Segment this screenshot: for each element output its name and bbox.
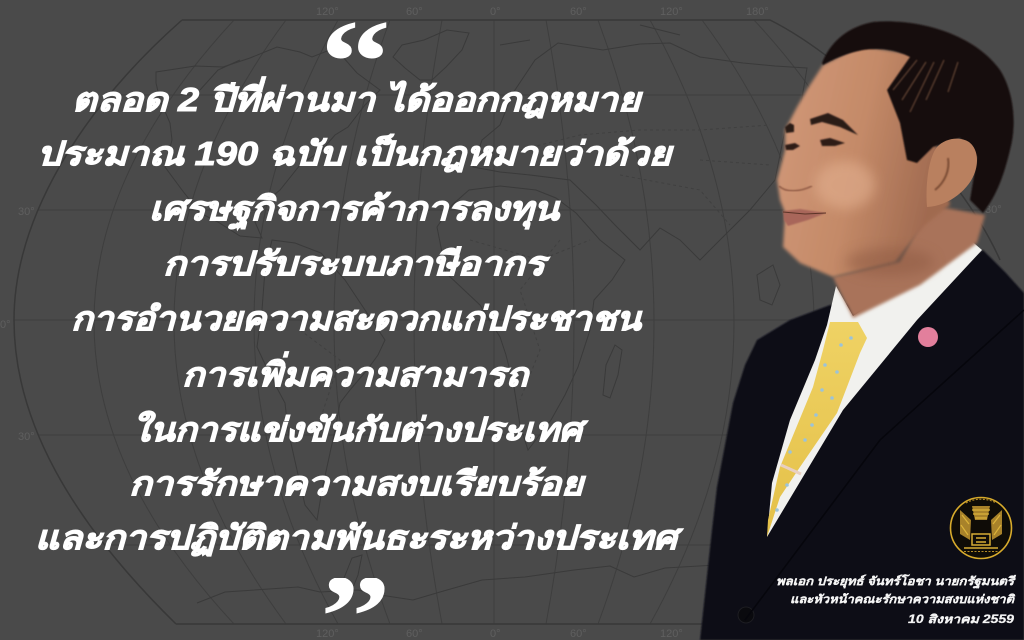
map degree labels: 30° xyxy=(18,206,35,218)
quote text: และการปฏิบัติตามพันธะระหว่างประเทศ xyxy=(35,519,684,557)
ear xyxy=(927,139,977,207)
map degree labels: 180° xyxy=(746,6,769,18)
map degree labels: 120° xyxy=(316,628,339,640)
nose shadow xyxy=(779,186,812,191)
map degree labels: 60° xyxy=(570,628,587,640)
tie clip xyxy=(781,465,801,474)
quote text: ประมาณ 190 ฉบับ เป็นกฎหมายว่าด้วย xyxy=(37,133,674,173)
mouth xyxy=(783,209,826,226)
jaw shadow xyxy=(846,248,934,276)
caption: name, title and date: และหัวหน้าคณะรักษาความสงบแห่งชาติ xyxy=(790,593,1016,606)
cheek highlight xyxy=(815,161,875,209)
quote text: ในการแข่งขันกับต่างประเทศ xyxy=(132,410,589,448)
map degree labels: 120° xyxy=(660,628,683,640)
tie dots xyxy=(775,336,853,512)
eyes xyxy=(785,138,845,150)
caption: name, title and date: 10 สิงหาคม 2559 xyxy=(908,613,1015,626)
portrait of the prime minister xyxy=(700,21,1024,640)
face xyxy=(777,46,950,277)
lapel pin xyxy=(918,327,938,347)
neck xyxy=(833,205,985,318)
yellow tie xyxy=(767,322,867,537)
map degree labels: 60° xyxy=(406,628,423,640)
caption: name, title and date xyxy=(776,574,1016,626)
government seal xyxy=(950,498,1012,558)
jacket button xyxy=(738,607,754,623)
hair xyxy=(822,21,1014,213)
map degree labels: 30° xyxy=(985,204,1002,216)
map degree labels: 60° xyxy=(406,6,423,18)
caption: name, title and date: พลเอก ประยุทธ์ จันทร์โอชา นายกรัฐมนตรี xyxy=(776,574,1016,589)
quote text xyxy=(35,76,684,557)
quote text: การเพิ่มความสามารถ xyxy=(182,351,530,393)
lapel shadow line xyxy=(745,310,1024,620)
map degree labels: 120° xyxy=(316,6,339,18)
quote text: ตลอด 2 ปีที่ผ่านมา ได้ออกกฎหมาย xyxy=(72,76,643,119)
quote text: การอำนวยความสะดวกแก่ประชาชน xyxy=(71,300,643,337)
shirt and collar xyxy=(767,238,982,537)
eyebrows xyxy=(785,113,858,135)
map degree labels: 0° xyxy=(490,628,501,640)
map degree labels: 0° xyxy=(0,319,11,331)
quote text: การปรับระบบภาษีอากร xyxy=(163,245,551,282)
hair highlights xyxy=(893,60,958,112)
quote text: เศรษฐกิจการค้าการลงทุน xyxy=(149,190,561,231)
map degree labels: 60° xyxy=(570,6,587,18)
map degree labels: 120° xyxy=(660,6,683,18)
map degree labels: 0° xyxy=(490,6,501,18)
suit jacket xyxy=(700,250,1024,640)
map degree labels: 30° xyxy=(18,431,35,443)
quote text: การรักษาความสงบเรียบร้อย xyxy=(129,465,586,502)
